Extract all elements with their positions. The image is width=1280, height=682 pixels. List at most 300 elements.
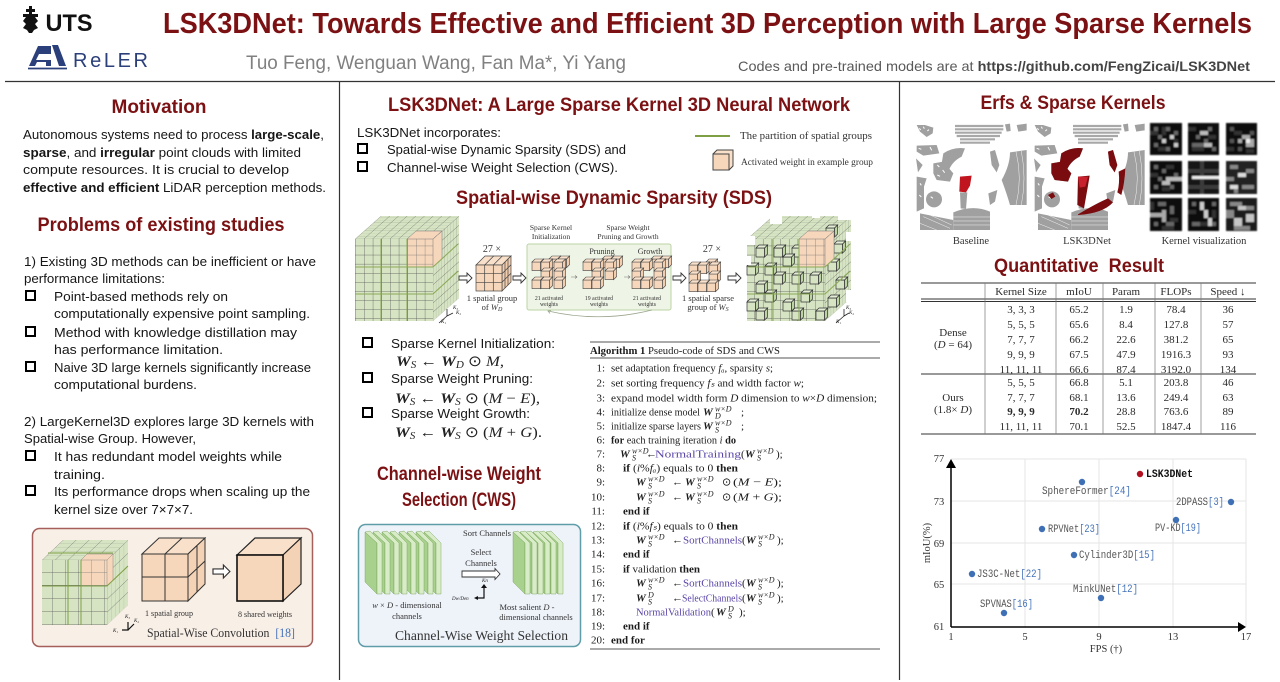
text block: motivation body: Autonomous systems need to process large-scale,	[23, 127, 324, 142]
algorithm lines: ⊙	[722, 492, 731, 504]
algorithm lines: w×D	[632, 446, 649, 456]
algorithm lines: initialize dense model	[611, 406, 700, 418]
algorithm lines: 20:	[591, 634, 605, 646]
algorithm lines: W	[620, 448, 631, 460]
heading: SDS: Spatial-wise Dynamic Sparsity (SDS)	[456, 188, 772, 209]
table: quantitative results: 52.5	[1116, 421, 1136, 433]
text block: SDS steps with formulas: ⊙	[464, 354, 486, 370]
text block: motivation body: sparse, and irregular point clouds with limited	[23, 145, 301, 160]
image: baseline ERF	[916, 124, 1027, 230]
table: quantitative results: 65.6	[1069, 319, 1089, 331]
text block: SDS steps with formulas: ←	[416, 354, 441, 370]
text block: problem 2: It has redundant model weights while	[54, 449, 282, 464]
text block: problem 2	[24, 414, 314, 517]
arrow	[513, 273, 526, 283]
algorithm lines: if (i%fₐ) equals to 0 then	[623, 462, 738, 474]
captions: step titles: Sparse Weight	[606, 223, 651, 232]
panel: middle column	[355, 95, 880, 649]
diagram: green partitioned cube	[42, 540, 128, 625]
legend: Activated weight in example group	[741, 158, 873, 168]
diagram: sparse cube: K₂	[848, 311, 854, 316]
point labels: 2DPASS[3]	[1176, 497, 1224, 509]
diagram: wide channels	[365, 531, 441, 594]
text block: SDS steps with formulas: M − E),	[489, 391, 539, 407]
points	[969, 471, 1234, 616]
axes: K₁	[112, 629, 118, 634]
heading: CWS	[377, 464, 542, 511]
text block: SDS steps with formulas: ⊙ (	[461, 391, 489, 407]
scatter chart: FPS vs mIoU	[922, 454, 1251, 655]
captions: ERF images: Baseline	[953, 236, 989, 247]
table: quantitative results: 5, 5, 5	[1007, 319, 1035, 331]
text block: problem 1: performance limitations:	[24, 271, 165, 286]
algorithm lines: w×D	[648, 576, 665, 584]
table: quantitative results: 70.2	[1069, 406, 1089, 418]
algorithm lines: D	[647, 590, 654, 600]
algorithm lines: (	[742, 534, 746, 546]
table: quantitative results: 28.8	[1116, 406, 1136, 418]
point labels: LSK3DNet	[1146, 469, 1193, 481]
captions: activated weights: weights	[540, 302, 559, 308]
table: quantitative results: 57	[1222, 319, 1234, 331]
caption: spatial-wise convolution: Spatial-Wise Convolution [18]	[147, 626, 295, 640]
axis ticks: 5	[1022, 632, 1028, 643]
table: quantitative results: 70.1	[1069, 421, 1089, 433]
text block: SDS steps with formulas: W	[440, 425, 457, 441]
text block: SDS steps with formulas: ←	[415, 425, 440, 441]
table: quantitative results: 249.4	[1164, 392, 1189, 404]
algorithm lines: w×D	[648, 474, 665, 484]
algorithm lines: 3:	[596, 392, 605, 404]
algorithm lines: );	[777, 534, 784, 546]
text block: problem 2: kernel size over 7×7×7.	[54, 502, 193, 517]
diagram: sparse group result	[689, 259, 721, 292]
algorithm lines: set sorting frequency fₛ and width factor w;	[611, 378, 804, 390]
heading: Quantitative Result: Quantitative Result	[994, 256, 1165, 277]
table: quantitative results: 134	[1220, 364, 1237, 376]
algorithm lines: SelectChannels	[682, 592, 742, 604]
header: title and logos	[23, 6, 1252, 74]
algorithm title: Algorithm 1 Pseudo-code of SDS and CWS	[590, 345, 780, 357]
axes	[946, 459, 1246, 632]
captions: step titles: Sparse Kernel	[530, 223, 572, 232]
heading: CWS: Selection (CWS)	[402, 490, 516, 511]
table: quantitative results: 63	[1222, 392, 1234, 404]
algorithm lines: D	[714, 412, 721, 420]
captions: step titles: Growth	[638, 247, 662, 256]
text block: problem 1: Method with knowledge distillation may	[54, 325, 298, 340]
algorithm: pseudo-code	[590, 342, 880, 649]
text block: SDS steps with formulas: S	[410, 431, 415, 442]
axis ticks: 61	[934, 622, 944, 633]
algorithm lines: S	[758, 540, 762, 548]
diagram: sparse cube	[745, 212, 854, 325]
legend	[695, 131, 873, 170]
text block: SDS steps with formulas: ⊙ (	[461, 425, 489, 441]
algorithm lines: end if	[623, 506, 650, 518]
text block: problem 2: Spatial-wise Group. However,	[24, 431, 196, 446]
table: quantitative results: 66.6	[1069, 364, 1089, 376]
captions: channel selection: dimensional channels	[499, 612, 573, 622]
diagram: sparse group pruned	[583, 256, 623, 289]
caption: sparse group: group of W	[687, 302, 726, 312]
captions: activated weights: 21 activated	[633, 296, 661, 302]
arrow: feedback loop	[548, 310, 652, 317]
axis ticks: 77	[934, 454, 944, 465]
algorithm lines: set adaptation frequency fₐ, sparsity s;	[611, 362, 773, 374]
algorithm lines: end for	[611, 634, 645, 646]
text block: problem 1: 1) Existing 3D methods can be inefficient or have	[24, 254, 316, 269]
arrow	[459, 273, 472, 283]
algorithm lines: );	[776, 448, 783, 460]
algorithm lines: w×D	[758, 532, 775, 542]
table: quantitative results: 1.9	[1119, 304, 1133, 316]
algorithm lines: S	[758, 598, 762, 606]
diagram: dense cube: K₁	[440, 320, 446, 325]
text block: SDS steps with formulas: W	[395, 391, 412, 407]
text block: SDS steps with formulas: Sparse Kernel Initialization:	[391, 336, 555, 351]
label: 27 times: 27 ×	[483, 244, 501, 255]
axes: channel: Kn	[481, 579, 488, 584]
panel: spatial-wise convolution	[32, 528, 312, 646]
algorithm lines: W	[746, 534, 757, 546]
point labels: JS3C-Net[22]	[977, 569, 1042, 581]
logo: UTS	[23, 6, 92, 37]
caption: channel-wise weight selection: Channel-Wise Weight Selection	[395, 628, 568, 643]
text block: SDS steps with formulas: ←	[415, 391, 440, 407]
algorithm lines: 19:	[591, 620, 605, 632]
captions: ERF images	[953, 236, 1247, 247]
table: quantitative results: 93	[1222, 349, 1234, 361]
point labels: PV-KD[19]	[1155, 523, 1201, 535]
algorithm lines: W	[703, 420, 714, 432]
diagram: dense group	[476, 256, 511, 291]
heading: LSK3DNet network: LSK3DNet: A Large Sparse Kernel 3D Neural Network	[388, 95, 850, 116]
algorithm lines: 1:	[596, 362, 605, 374]
captions: step titles: Initialization	[532, 232, 570, 241]
algorithm lines: 14:	[591, 548, 605, 560]
text block: incorporates list: LSK3DNet incorporates:	[357, 125, 501, 140]
algorithm lines: SortChannels	[683, 534, 742, 546]
point labels: SphereFormer[24]	[1042, 486, 1131, 498]
algorithm lines: w×D	[758, 576, 775, 584]
text block: motivation body: compute resources. It is crucial to develop	[23, 162, 289, 177]
table: quantitative results: 5.1	[1119, 377, 1133, 389]
table: quantitative results: 47.9	[1116, 349, 1136, 361]
algorithm lines: 15:	[591, 564, 605, 576]
logo: ReLER: ReLER	[73, 50, 148, 72]
table: quantitative results: 89	[1222, 406, 1234, 418]
table: quantitative results: 65	[1222, 334, 1234, 346]
axes	[112, 615, 139, 634]
algorithm lines: W	[636, 476, 647, 488]
algorithm lines: (	[742, 578, 746, 590]
table: quantitative results: 22.6	[1116, 334, 1136, 346]
captions: activated weights: 19 activated	[585, 296, 613, 302]
text block: problem 1: has performance limitation.	[54, 342, 223, 357]
algorithm lines: W	[746, 592, 757, 604]
algorithm lines: ←	[646, 448, 657, 460]
algorithm lines: W	[685, 476, 696, 488]
table: quantitative results: Param	[1112, 286, 1140, 298]
text block: SDS steps with formulas: Sparse Weight Growth:	[391, 406, 530, 421]
algorithm lines: (	[711, 606, 715, 618]
table: quantitative results: 9, 9, 9	[1007, 406, 1035, 418]
captions: channel selection: Most salient D -	[499, 602, 555, 612]
caption: dense group: 1 spatial group	[467, 293, 517, 303]
arrow: spatial group to shared weights	[213, 565, 230, 578]
algorithm lines: );	[777, 578, 784, 590]
arrows: step flow	[571, 276, 630, 278]
algorithm lines: 6:	[596, 434, 605, 446]
algorithm lines: if validation then	[623, 564, 700, 576]
algorithm lines: S	[757, 454, 761, 462]
text block: SDS steps with formulas: S	[411, 360, 416, 371]
algorithm lines: S	[648, 540, 652, 548]
table: quantitative results: 65.2	[1069, 304, 1089, 316]
algorithm lines: w×D	[715, 404, 732, 414]
table: quantitative results: 381.2	[1164, 334, 1188, 346]
arrow: select channels	[462, 568, 500, 580]
captions: step titles	[530, 223, 662, 256]
algorithm lines: S	[758, 582, 762, 592]
caption: dense group: of W	[482, 302, 498, 312]
table: quantitative results: 7, 7, 7	[1007, 392, 1035, 404]
algorithm lines: w×D	[648, 532, 665, 542]
captions: channel selection: Sort Channels	[463, 528, 511, 538]
table: quantitative results: 11, 11, 11	[1000, 421, 1042, 433]
text block: problem 1: Point-based methods rely on	[54, 289, 228, 304]
image: LSK3DNet ERF	[1034, 124, 1145, 230]
algorithm lines: end if	[623, 548, 650, 560]
captions: channel selection: Select	[471, 547, 492, 557]
caption: 1 spatial group: 1 spatial group	[145, 608, 193, 618]
table: quantitative results: 87.4	[1116, 364, 1136, 376]
text block: SDS steps with formulas: S	[455, 431, 461, 442]
captions: activated weights: weights	[590, 302, 609, 308]
algorithm lines: ←	[672, 476, 683, 488]
text block: SDS steps with formulas: D	[455, 360, 465, 371]
algorithm lines: w×D	[697, 474, 714, 484]
table: quantitative results: 203.8	[1164, 377, 1189, 389]
axis ticks: 73	[934, 497, 944, 508]
diagram: dense cube: K₂	[455, 311, 461, 316]
algorithm lines: 9:	[596, 476, 605, 488]
text block: problem 2: training.	[54, 467, 105, 482]
panel: channel-wise weight selection	[358, 524, 580, 646]
algorithm lines: ←	[672, 578, 683, 590]
algorithm lines: S	[648, 482, 652, 490]
captions: activated weights	[535, 296, 661, 308]
algorithm lines: 4:	[596, 406, 605, 418]
axis ticks: 17	[1241, 632, 1251, 643]
panel: right column	[916, 93, 1257, 655]
text block: SDS steps with formulas: M + G).	[489, 425, 541, 441]
table: quantitative results: FLOPs	[1160, 286, 1192, 298]
captions: channel selection: Channels	[465, 558, 497, 568]
algorithm lines: initialize sparse layers	[611, 420, 701, 432]
text block: SDS steps with formulas: M,	[486, 354, 504, 370]
algorithm lines: 16:	[591, 578, 605, 590]
point labels: SPVNAS[16]	[980, 599, 1033, 611]
algorithm lines: W	[703, 406, 714, 418]
diagram: SDS pipeline	[355, 212, 854, 325]
table: quantitative results: 3192.0	[1161, 364, 1192, 376]
algorithm lines	[591, 362, 877, 646]
algorithm lines: (	[742, 592, 746, 604]
caption: sparse group	[682, 293, 734, 313]
captions: channel selection: w × D - dimensional	[372, 600, 442, 610]
diagram: sparse cube: K₁	[835, 320, 841, 325]
algorithm lines: S	[697, 482, 701, 490]
algorithm lines: end if	[623, 620, 650, 632]
panel: left column	[23, 97, 326, 646]
table: quantitative results: 66.2	[1069, 334, 1089, 346]
arrow	[728, 273, 741, 283]
text block: motivation body	[23, 127, 326, 195]
table: quantitative results: 763.6	[1164, 406, 1189, 418]
table: quantitative results: 8.4	[1119, 319, 1133, 331]
table: quantitative results: 7, 7, 7	[1007, 334, 1035, 346]
algorithm lines: ⊙	[722, 476, 731, 488]
algorithm lines: );	[739, 606, 746, 618]
algorithm lines: ;	[741, 420, 744, 432]
captions: ERF images: LSK3DNet	[1063, 236, 1111, 247]
table: quantitative results: 11, 11, 11	[1000, 364, 1042, 376]
captions: ERF images: Kernel visualization	[1162, 236, 1247, 247]
axes: channel	[451, 579, 488, 602]
axis ticks	[934, 454, 1251, 643]
axis ticks: 13	[1168, 632, 1178, 643]
table: quantitative results: (1.8× D)	[934, 404, 972, 416]
axis ticks: 65	[934, 580, 944, 591]
axis title: FPS: FPS (†)	[1090, 644, 1123, 655]
diagram: sparse group grown	[632, 256, 672, 289]
table: quantitative results: 1916.3	[1161, 349, 1192, 361]
table: quantitative results	[921, 283, 1256, 434]
text block: problem 2: Its performance drops when scaling up the	[54, 484, 310, 499]
text block: incorporates list	[357, 125, 626, 175]
algorithm lines: W	[716, 606, 727, 618]
table: quantitative results: 1847.4	[1161, 421, 1192, 433]
diagram: shared weight cube	[237, 538, 301, 601]
caption: 8 shared weights: 8 shared weights	[238, 609, 292, 619]
label: 27 times: 27 ×	[703, 244, 721, 255]
algorithm lines: w×D	[648, 490, 665, 498]
text block: SDS steps with formulas: Sparse Weight Pruning:	[391, 371, 533, 386]
diagram: dense cube	[355, 216, 461, 325]
point labels: MinkUNet[12]	[1073, 584, 1138, 596]
algorithm lines: expand model width form D dimension to w×D dimension;	[611, 392, 877, 404]
text block: incorporates list: Spatial-wise Dynamic Sparsity (SDS) and	[387, 142, 626, 157]
algorithm lines: 12:	[591, 520, 605, 532]
table: quantitative results: 127.8	[1164, 319, 1189, 331]
diagram: dense cube: K₃	[452, 306, 458, 311]
caption: dense group	[467, 293, 517, 313]
algorithm lines: W	[636, 592, 647, 604]
table: quantitative results: 46	[1222, 377, 1234, 389]
algorithm lines: W	[636, 534, 647, 546]
table: quantitative results: 3, 3, 3	[1007, 304, 1035, 316]
captions: step titles: Pruning and Growth	[597, 232, 659, 241]
axis ticks: 9	[1096, 632, 1102, 643]
axis ticks: 69	[934, 539, 944, 550]
algorithm lines: S	[648, 582, 652, 592]
table: quantitative results: Speed ↓	[1210, 286, 1246, 298]
table: quantitative results: 13.6	[1116, 392, 1136, 404]
algorithm lines: W	[746, 578, 757, 590]
text block: SDS steps with formulas	[363, 336, 555, 442]
text block: SDS steps with formulas: W	[440, 391, 457, 407]
algorithm lines: S	[697, 496, 701, 506]
logo: UTS: UTS	[46, 10, 92, 37]
algorithm lines: S	[715, 426, 719, 434]
algorithm lines: (	[741, 448, 745, 460]
captions: activated weights: 21 activated	[535, 296, 563, 302]
algorithm lines: if (i%fₛ) equals to 0 then	[623, 520, 738, 532]
algorithm lines: W	[636, 492, 647, 504]
algorithm lines: W	[636, 578, 647, 590]
algorithm lines: ←	[672, 592, 683, 604]
axes: channel: Dw/Den	[451, 597, 469, 602]
text block: motivation body: effective and efficient LiDAR perception methods.	[23, 180, 326, 195]
algorithm lines: ←	[672, 534, 683, 546]
axis ticks: 1	[948, 632, 954, 643]
code link: Codes and pre-trained models are at https://github.com/FengZicai/LSK3DNet	[738, 58, 1250, 74]
text block: problem 1: computationally expensive point sampling.	[54, 306, 310, 321]
algorithm lines: w×D	[697, 490, 714, 498]
algorithm lines: w×D	[715, 418, 732, 428]
table: quantitative results: 116	[1220, 421, 1237, 433]
logo: ReLER	[28, 45, 148, 72]
algorithm lines: W	[745, 448, 756, 460]
algorithm lines: 18:	[591, 606, 605, 618]
algorithm lines: );	[777, 592, 784, 604]
caption: dense group: D	[497, 307, 503, 313]
point labels	[977, 469, 1224, 611]
axes: K₃	[124, 615, 130, 620]
diagram: sparse cube: K₃	[845, 306, 851, 311]
diagram: sparse group initial	[532, 256, 570, 289]
text block: problem 1: computational burdens.	[54, 377, 197, 392]
axis title: mIoU: mIoU(%)	[922, 522, 933, 563]
algorithm lines: w×D	[758, 590, 775, 600]
point labels: RPVNet[23]	[1048, 524, 1100, 536]
table: quantitative results: 9, 9, 9	[1007, 349, 1035, 361]
table: quantitative results: Ours	[942, 392, 964, 404]
algorithm lines: 11:	[591, 506, 605, 518]
table: quantitative results: Dense	[939, 327, 967, 339]
algorithm lines: 10:	[591, 492, 605, 504]
algorithm lines: ;	[741, 406, 744, 418]
axes: K₂	[133, 619, 139, 624]
heading: CWS: Channel-wise Weight	[377, 464, 542, 485]
captions: step titles: Pruning	[589, 247, 615, 256]
table: quantitative results: 36	[1222, 304, 1234, 316]
text block: problem 1	[24, 254, 316, 392]
algorithm lines: 17:	[591, 592, 605, 604]
text block: SDS steps with formulas: S	[455, 397, 461, 408]
captions: activated weights: weights	[638, 302, 657, 308]
table: quantitative results: 78.4	[1166, 304, 1186, 316]
algorithm lines: NormalTraining	[655, 448, 742, 460]
algorithm lines: 2:	[596, 378, 605, 390]
algorithm lines: D	[727, 604, 734, 614]
algorithm lines: SortChannels	[683, 578, 742, 590]
captions: channel selection: channels	[392, 611, 422, 621]
image: kernel visualization	[1150, 123, 1257, 231]
text block: problem 1: Naive 3D large kernels significantly increase	[54, 360, 311, 375]
